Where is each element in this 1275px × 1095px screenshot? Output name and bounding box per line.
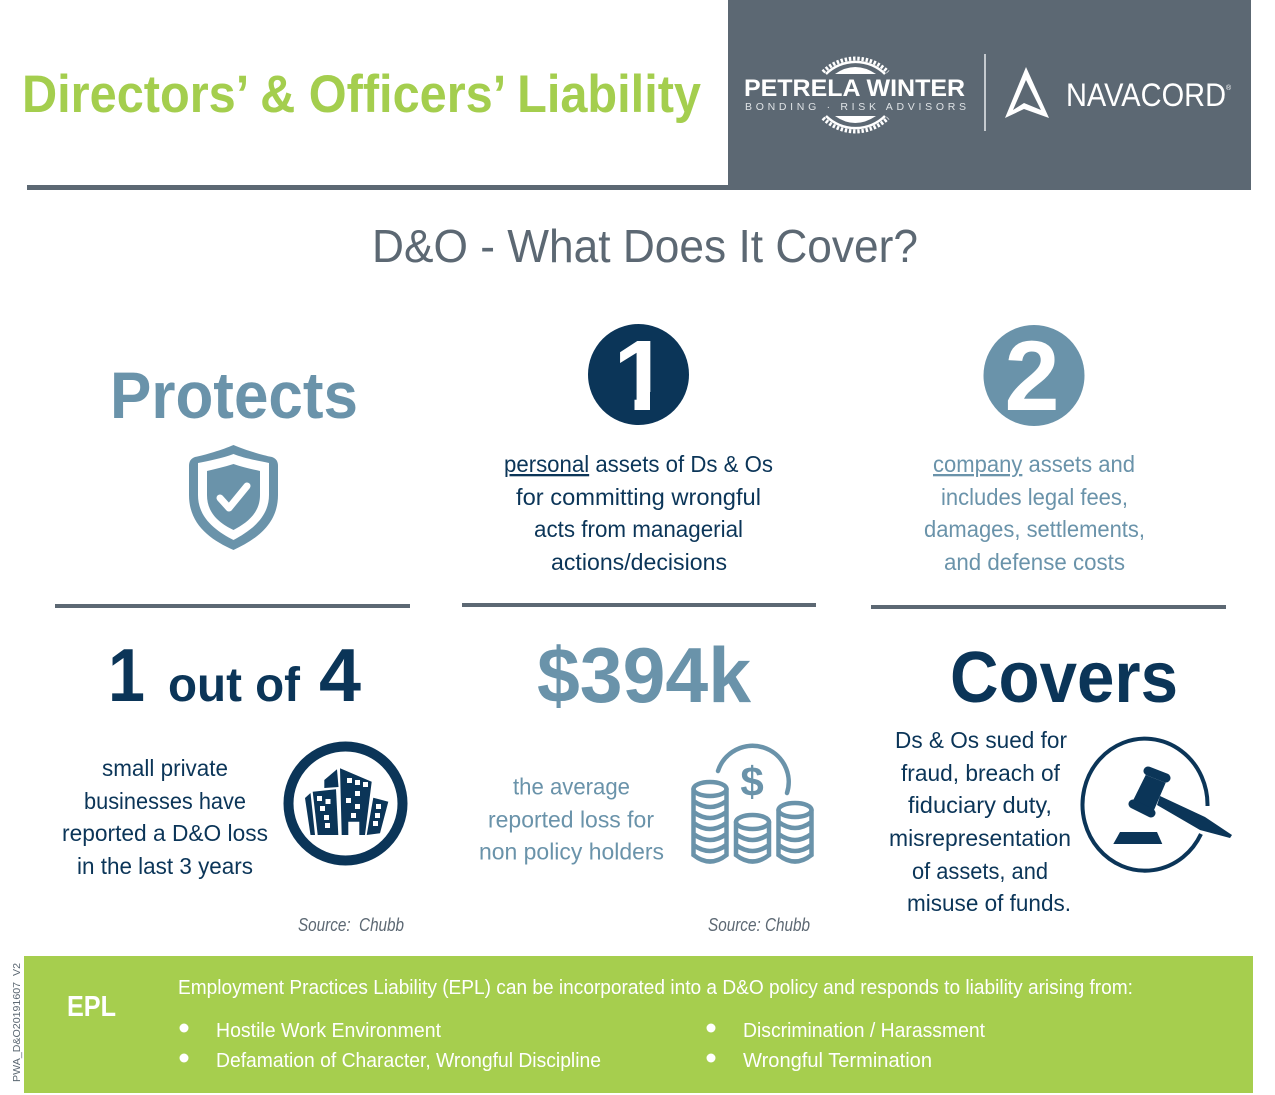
text: Ds and Os sued for: of assets, and	[912, 858, 1048, 884]
title: Directors’ & Officers’ Liability	[22, 65, 701, 124]
logo: Navacord: NAVACORD	[1066, 77, 1226, 113]
EPL bullets: Discrimination / Harassment	[743, 1020, 985, 1042]
icon: coins: $	[740, 758, 764, 805]
text: Ds and Os sued for: misrepresentation	[889, 825, 1071, 851]
text: personal assets: actions/decisions	[551, 549, 727, 575]
logo: Navacord: ®	[1226, 84, 1232, 92]
section heading: D&O - What Does It Cover?	[372, 220, 918, 272]
logo: Petrela Winter	[744, 59, 966, 131]
stat: 1 out of 4: 1	[108, 633, 145, 717]
EPL bullets: Wrongful Termination	[743, 1050, 932, 1072]
text: personal assets: personal assets of Ds & Os	[504, 451, 773, 477]
text: Ds and Os sued for: misuse of funds.	[907, 890, 1071, 916]
text: average reported loss: the average	[513, 774, 630, 800]
icon: coins	[694, 746, 812, 862]
document code: PWA_D&O20191607 V2	[11, 963, 23, 1082]
text: personal assets: acts from managerial	[534, 516, 743, 542]
text: Ds and Os sued for: fiduciary duty,	[908, 792, 1052, 818]
text: company assets: company assets and	[933, 451, 1135, 477]
text: personal assets	[504, 451, 773, 575]
EPL label: EPL	[67, 991, 116, 1023]
badge: number 2: 2	[1004, 320, 1060, 431]
source: Chubb right: Source: Chubb	[708, 915, 810, 935]
panel: EPL	[24, 956, 1253, 1093]
text: personal assets: for committing wrongful	[516, 484, 761, 510]
logo: Navacord	[1005, 67, 1232, 118]
text: Ds and Os sued for: fraud, breach of	[901, 760, 1061, 786]
stat: $394k: $394k	[537, 631, 752, 719]
stat: 1 out of 4: out of	[168, 659, 301, 712]
text: small private businesses: reported a D&O loss	[62, 820, 268, 846]
text: average reported loss: non policy holders	[479, 838, 664, 864]
text: company assets: and defense costs	[944, 549, 1125, 575]
text: company assets: damages, settlements,	[924, 516, 1145, 542]
stat: 1 out of 4: 4	[319, 633, 361, 717]
logo divider	[984, 54, 986, 131]
text: Ds and Os sued for: Ds & Os sued for	[895, 727, 1067, 753]
panel: logo header	[728, 0, 1251, 190]
text: average reported loss	[479, 774, 664, 864]
EPL bullets: Hostile Work Environment	[216, 1020, 441, 1042]
logo: Petrela Winter: BONDING · RISK ADVISORS	[745, 101, 966, 113]
icon: shield	[189, 445, 278, 550]
icon: buildings	[288, 746, 402, 860]
text: company assets	[924, 451, 1145, 575]
badge: number 1	[588, 320, 689, 432]
text: average reported loss: reported loss for	[488, 806, 654, 832]
source: Chubb left: Source: Chubb	[298, 915, 404, 935]
EPL bullets	[180, 1020, 985, 1072]
text: small private businesses: businesses have	[84, 788, 246, 814]
EPL intro: Employment Practices Liability (EPL) can be incorporated into a D&O policy and responds to liability arising from:	[178, 977, 1133, 999]
badge: number 2	[984, 320, 1084, 431]
text: Ds and Os sued for	[889, 727, 1071, 916]
badge: number 1: 1	[613, 320, 669, 432]
text: small private businesses: small private	[102, 755, 228, 781]
stat: 1 out of 4	[108, 633, 361, 717]
logo: Petrela Winter: PETRELA WINTER	[744, 75, 965, 102]
heading: Protects: Protects	[110, 358, 358, 432]
header rule	[27, 185, 728, 190]
column rules	[55, 603, 1226, 609]
text: small private businesses	[62, 755, 268, 879]
EPL bullets: Defamation of Character, Wrongful Discipline	[216, 1050, 601, 1072]
icon: gavel	[1083, 739, 1232, 871]
text: company assets: includes legal fees,	[941, 484, 1128, 510]
text: small private businesses: in the last 3 years	[77, 853, 253, 879]
heading: Covers: Covers	[950, 638, 1178, 718]
